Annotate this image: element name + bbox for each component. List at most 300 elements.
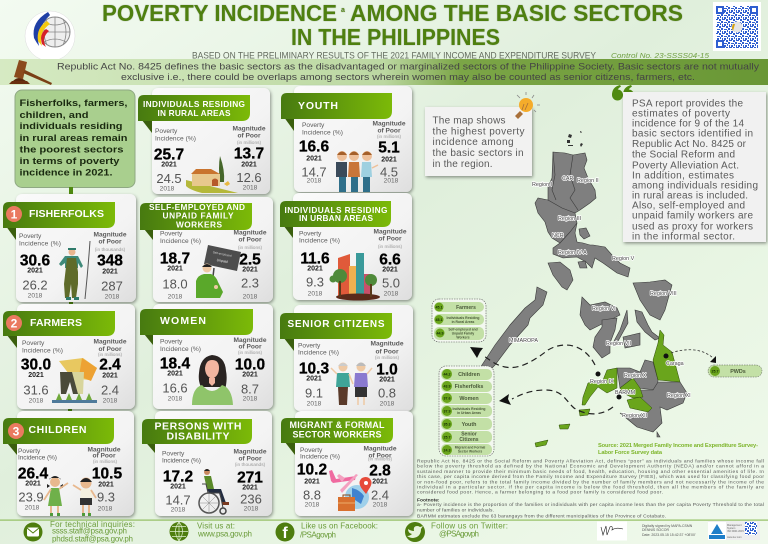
region labels: MIMAROPA [509, 338, 538, 344]
definition text: this case, per capita income derived from the Family Income and Expenditure Survey (FIES), which was used for classifying food poor [417, 474, 764, 480]
panel: persons with disability: Poverty [162, 450, 185, 458]
panel: women: of Poor [238, 344, 262, 350]
region labels: NCR [552, 233, 564, 239]
panel: persons with disability: DISABILITY [166, 430, 230, 442]
panel: farmers: Poverty [22, 340, 45, 347]
title: AMONG THE BASIC SECTORS [350, 0, 683, 26]
panel: children: 2018 [98, 505, 113, 512]
panel: individuals residing in rural areas: INDIVIDUALS RESIDING [143, 99, 245, 109]
panel: migrant and formal sector workers: Poverty [300, 447, 323, 454]
panel: individuals residing in urban areas: 2021 [307, 266, 323, 272]
legend: Region IX sectors: Individuals Residing [453, 407, 485, 411]
region labels: Region II [577, 178, 599, 184]
panel: women: 2021 [167, 370, 183, 378]
arrow: Region IX to left legend [484, 345, 613, 414]
legend: Region IX sectors: Sector Workers [458, 450, 482, 454]
panel: persons with disability: Magnitude [234, 448, 267, 456]
callout: map note: The map shows [432, 116, 506, 126]
panel: farmers: Incidence (%) [22, 348, 63, 354]
panel: persons with disability: 2018 [244, 505, 259, 512]
panel: individuals residing in urban areas: Incidence (%) [299, 238, 340, 244]
panel: senior citizens: SENIOR CITIZENS [288, 319, 385, 330]
panel: migrant and formal sector workers: Incidence (%) [300, 454, 340, 460]
panel: key finding: individuals residing [20, 121, 123, 132]
legend: MIMAROPA sectors: Farmers [456, 305, 476, 311]
callout: map note: in the region. [432, 159, 492, 170]
panel: fisherfolks: of Poor [98, 238, 122, 245]
panel: self-employed and unpaid family workers: SELF-EMPLOYED AND [149, 202, 245, 212]
panel: individuals residing in rural areas: Poverty [155, 128, 178, 135]
panel: key finding: incidence in 2021. [20, 168, 112, 178]
panel: migrant and formal sector workers: (in millions) [368, 456, 393, 462]
panel: self-employed and unpaid family workers: 2018 [168, 293, 183, 300]
panel: self-employed and unpaid family workers: 2021 [167, 266, 183, 272]
definition text: or non-food poor, refers to the total family income divided by the number of family members and not necessarily the income of the [417, 479, 764, 485]
rank badge 2: 2 [11, 316, 18, 330]
panel: key finding: in terms of poverty [20, 156, 120, 167]
panel: women: WOMEN [160, 315, 206, 327]
illustration: farmer [52, 358, 97, 403]
footer: Facebook: /PSAgovph [300, 530, 336, 540]
illustration: protester with sign: Unpaid [216, 258, 228, 264]
panel: youth: 2018 [384, 177, 399, 184]
panel: persons with disability: 14.7 [165, 493, 191, 508]
panel: individuals residing in rural areas: (in millions) [237, 140, 262, 146]
source note: Labor Force Survey data [598, 450, 663, 456]
panel: migrant and formal sector workers: 2.8 [369, 462, 391, 480]
panel: self-employed and unpaid family workers: (in millions) [238, 245, 263, 251]
region labels: Region XII [622, 413, 647, 419]
panel: youth: 5.1 [378, 140, 400, 156]
panel: key finding: Fisherfolks, farmers, [20, 98, 128, 109]
region labels: Region V [612, 256, 635, 262]
panel: persons with disability: (in thousands) [235, 462, 266, 468]
footnotes: Footnote: [417, 498, 440, 504]
panel: senior citizens [280, 305, 413, 411]
panel: fisherfolks: 26.2 [22, 278, 48, 293]
callout: map note: the basic sectors in [432, 148, 524, 159]
panel: farmers: 2021 [102, 372, 118, 380]
region labels: Region VIII [650, 291, 677, 297]
digital signature note: Digitally signed by MAPA-CSMN [642, 524, 693, 528]
panel: PSA report text: Also, self-employed and [632, 200, 745, 212]
panel: children: 9.3 [97, 490, 115, 505]
QR code [713, 2, 761, 51]
digital signature note [642, 524, 696, 537]
footnotes: a- Poverty incidence is the proportion of the families or individuals with per capita income less than the per capita Poverty Threshold to the total [417, 502, 764, 508]
digital signature note: Date: 2023.05.15 15:42:37 +08'00' [642, 533, 696, 537]
panel: youth: Incidence (%) [302, 130, 343, 136]
footer: website: Visit us at: [197, 522, 235, 530]
region labels: Region IV-A [558, 250, 587, 256]
legend: Region IX sectors: Women [459, 396, 479, 402]
panel: migrant and formal sector workers: 8.8 [303, 488, 321, 503]
panel: migrant and formal sector workers: SECTOR WORKERS [292, 430, 382, 440]
illustration: plane, globe and suitcase [329, 470, 372, 511]
footer: Twitter [405, 522, 508, 542]
footer: Facebook: Like us on Facebook: [301, 522, 378, 530]
panel: senior citizens: 2018 [380, 400, 395, 407]
panel: individuals residing in rural areas: 13.7 [234, 146, 264, 162]
panel: PSA report text [623, 92, 766, 242]
panel: youth: Magnitude [373, 120, 406, 128]
certification marks: Management [727, 524, 742, 527]
panel: fisherfolks: 2021 [102, 268, 118, 276]
legend: MIMAROPA sectors: Self-employed and [448, 328, 478, 332]
certification marks [708, 521, 760, 540]
panel: fisherfolks: FISHERFOLKS [29, 208, 104, 220]
region labels: Caraga [666, 361, 684, 367]
title: POVERTY INCIDENCE [102, 0, 337, 26]
panel: persons with disability: 2018 [171, 506, 186, 513]
icon: opening quotation mark [612, 85, 634, 100]
panel: farmers: Magnitude [94, 338, 127, 346]
panel: senior citizens: Magnitude [371, 340, 404, 348]
panel: women: 18.4 [160, 356, 190, 372]
panel: individuals residing in rural areas: of Poor [237, 132, 261, 140]
legend: MIMAROPA sectors: in Rural Areas [452, 320, 475, 324]
panel: key finding [15, 90, 135, 188]
footer: Facebook [276, 522, 378, 542]
legend: Region IX sectors: Youth [462, 422, 476, 428]
panel: self-employed and unpaid family workers [140, 197, 273, 302]
panel: women: 10.0 [235, 356, 265, 374]
panel: women: 2021 [242, 372, 258, 378]
illustration: person in wheelchair [199, 469, 229, 514]
panel: self-employed and unpaid family workers: Poverty [160, 230, 183, 238]
panel: migrant and formal sector workers: 2021 [372, 478, 388, 486]
panel: senior citizens: of Poor [375, 348, 399, 356]
panel: individuals residing in urban areas: 9.3 [306, 275, 324, 290]
panel: key finding: in rural areas remain [20, 133, 128, 144]
panel: individuals residing in rural areas: 2018 [243, 184, 258, 192]
panel: children: 23.9 [18, 490, 44, 505]
band: Republic Act statement: exclusive i.e., there could be overlaps among sectors wherein women may also be counted as senior citizens, farmers, etc. [121, 72, 695, 83]
illustration: children [44, 476, 96, 516]
legend: MIMAROPA sectors: Workers [456, 336, 470, 340]
panel: women: 2018 [243, 395, 258, 402]
illustration: woman [192, 355, 233, 405]
footer: technical inquiries: For technical inquiries: [50, 520, 135, 529]
legend: Region IX sectors: 37.9 [444, 410, 450, 414]
panel: individuals residing in rural areas: Magnitude [233, 126, 266, 132]
panel: children: (in millions) [93, 459, 118, 465]
panel: individuals residing in urban areas: 2018 [308, 290, 323, 297]
panel: farmers: FARMERS [30, 317, 82, 329]
definition text [417, 458, 764, 496]
panel: self-employed and unpaid family workers: 2.5 [239, 252, 261, 268]
source note [598, 443, 758, 456]
panel: women: 8.7 [241, 382, 259, 397]
definition text: individual in a particular sector. If the per capita income is below the food threshold, then all the members of the family are [417, 484, 764, 490]
footnotes: BARMM estimates exclude the 63 barangays from the different municipalities of the Province of Cotabato. [417, 514, 666, 520]
panel: children: 2018 [25, 504, 40, 511]
title [102, 0, 683, 50]
panel: senior citizens: 0.8 [378, 386, 396, 401]
arrow heads and region dots [470, 347, 716, 405]
panel: PSA report text: in rural areas is included. [632, 190, 748, 202]
panel: fisherfolks: Incidence (%) [19, 240, 61, 248]
panel: persons with disability: 271 [237, 470, 263, 486]
panel: individuals residing in urban areas: 6.6 [379, 252, 401, 268]
subtitle: BASED ON THE PRELIMINARY RESULTS OF THE 2021 FAMILY INCOME AND EXPENDITURE SURVEY [192, 50, 597, 62]
panel: individuals residing in rural areas: IN RURAL AREAS [158, 108, 231, 118]
arrow: Caraga to PWDs [671, 350, 713, 358]
legend: Region IX sectors: Migrant and Formal [455, 446, 485, 450]
panel: PSA report text: in the informal sector. [632, 232, 735, 242]
panel: PSA report text: PSA report provides the [632, 98, 743, 110]
footer: website [170, 522, 252, 541]
panel: youth: 2021 [306, 156, 322, 162]
title: a [341, 7, 345, 14]
logo: Philippine Statistics Authority [25, 11, 75, 61]
panel: fisherfolks: 348 [97, 252, 123, 270]
illustration: rural house [186, 156, 238, 193]
panel: migrant and formal sector workers: 2018 [305, 501, 320, 508]
panel: persons with disability: PERSONS WITH [154, 420, 242, 432]
highlighted regions [535, 330, 680, 447]
footer: website: www.psa.gov.ph [197, 530, 252, 538]
panel: PSA report text: incidence for 9 of the 14 [632, 118, 744, 130]
region labels [509, 176, 691, 419]
panel: self-employed and unpaid family workers: of Poor [238, 236, 262, 244]
panel: persons with disability: 236 [240, 492, 262, 507]
panel: senior citizens: 10.3 [299, 360, 329, 378]
panel: children: CHILDREN [28, 424, 86, 436]
panel: fisherfolks: 2021 [27, 268, 43, 274]
panel: individuals residing in rural areas: 12.6 [236, 170, 262, 185]
panel: children: 10.5 [92, 466, 122, 482]
panel: individuals residing in urban areas: 2018 [384, 290, 399, 297]
panel: migrant and formal sector workers: of Poor [368, 452, 392, 460]
legend: Region IX sectors: 35.3 [444, 422, 450, 426]
panel: fisherfolks: Magnitude [94, 232, 127, 238]
panel: migrant and formal sector workers: 2018 [373, 501, 388, 508]
panel: individuals residing in rural areas: 24.5 [156, 171, 182, 186]
panel: fisherfolks: 2018 [105, 293, 120, 300]
illustration: protester with sign [196, 245, 241, 298]
legend: PWDs: PWDs [730, 369, 746, 375]
legend: MIMAROPA sectors: 45.1 [436, 318, 442, 322]
panel: PSA report text: the Social Reform and [632, 150, 735, 160]
panel: farmers: 2018 [103, 397, 118, 404]
panel: individuals residing in urban areas: of Poor [378, 236, 402, 242]
legend: Region IX sectors: 44.2 [444, 372, 450, 376]
panel: women [140, 304, 273, 409]
signature [597, 522, 627, 540]
illustration: fisherman [59, 241, 90, 300]
legend: Region IX sectors: in Urban Areas [457, 411, 481, 415]
panel: individuals residing in urban areas: (in millions) [378, 244, 403, 250]
panel: individuals residing in urban areas: 11.6 [300, 250, 330, 268]
region labels: Region X [624, 373, 647, 379]
legend: MIMAROPA sectors: 44.9 [436, 332, 444, 336]
definition text: Republic Act No. 8425 or the Social Reform and Poverty Alleviation Act, defines “poor” as individuals and families whose income fall [417, 458, 764, 464]
panel: individuals residing in rural areas: Incidence (%) [155, 136, 196, 142]
panel: individuals residing in urban areas [280, 193, 412, 300]
legend: PWDs [708, 365, 762, 377]
panel: fisherfolks [3, 194, 136, 302]
panel: youth: 2021 [381, 156, 397, 164]
region labels: Region VI [592, 306, 616, 312]
panel: women: (in millions) [238, 350, 263, 356]
panel: PSA report text: among individuals residing [632, 180, 758, 192]
panel: farmers: 2.4 [99, 356, 121, 374]
callout: map note: the highest poverty [432, 126, 524, 138]
illustration: protester with sign: Self-employed [212, 250, 232, 258]
panel: persons with disability [142, 411, 272, 516]
legend: Region IX sectors: 43.9 [444, 384, 450, 388]
footnotes: number of families or individuals. [417, 508, 494, 514]
panel: individuals residing in rural areas [138, 88, 270, 194]
band: Republic Act statement: Republic Act No. 8425 defines the basic sectors as the disadvantaged or marginalized sectors of the Philippine Society. Basic sectors are not mutually [57, 61, 759, 72]
panel: fisherfolks: 30.6 [20, 252, 50, 270]
panel: women: Incidence (%) [160, 346, 201, 353]
panel: youth [281, 86, 412, 192]
region labels: Region VII [606, 341, 631, 347]
rank badge 3: 3 [13, 424, 20, 438]
panel: PSA report text: In addition, estimates [632, 170, 734, 182]
panel: children: of Poor [92, 452, 116, 460]
panel: fisherfolks: 287 [101, 279, 123, 294]
illustration: three youths [336, 151, 378, 192]
legend: MIMAROPA sectors: Unpaid Family [452, 332, 474, 336]
panel: senior citizens: (in millions) [375, 355, 400, 361]
panel: farmers [3, 304, 135, 409]
region labels: Region III [558, 216, 581, 222]
legend: Region IX sectors: Children [458, 372, 480, 378]
panel: farmers: 31.6 [23, 382, 49, 398]
panel: PSA report text: Poverty Alleviation Act. [632, 160, 739, 172]
panel: fisherfolks: 2018 [28, 292, 43, 299]
panel: persons with disability: Incidence (%) [162, 458, 201, 464]
panel: self-employed and unpaid family workers: 18.7 [160, 250, 190, 268]
legend: Region IX sectors: Fisherfolks [455, 384, 483, 390]
panel: key finding: the poorest sectors [20, 144, 124, 156]
panel: children: 2021 [98, 482, 114, 488]
panel: self-employed and unpaid family workers: WORKERS [176, 220, 222, 230]
legend: MIMAROPA sectors: Individuals Residing [447, 316, 479, 320]
control number: Control No. 23-SSSS04-15 [611, 51, 710, 60]
panel: farmers: 2018 [29, 397, 44, 404]
panel: children: 2021 [25, 480, 41, 488]
legend: PWDs: 25.7 [712, 370, 718, 374]
panel: women: 16.6 [162, 381, 188, 396]
panel: women: Poverty [160, 338, 183, 346]
panel: farmers: 30.0 [21, 356, 51, 374]
callout: map note [425, 107, 532, 176]
title: IN THE PHILIPPINES [291, 24, 500, 50]
panel: senior citizens: 1.0 [376, 362, 398, 378]
panel: PSA report text: basic sectors identified in [632, 128, 753, 140]
definition text: considered food poor. Hence, a farmer belonging to a food poor family is considered food poor. [417, 490, 663, 496]
footer rule [0, 520, 768, 521]
panel: senior citizens: 2021 [379, 376, 395, 384]
panel: youth: 4.5 [380, 165, 398, 180]
panel: youth: 14.7 [301, 165, 327, 180]
definition text: sustained manner to provide their minimum basic needs of food, health, education, housing and other essential amenities of life. In [417, 469, 764, 475]
panel: women: Magnitude [234, 337, 267, 344]
rank badge 1: 1 [11, 208, 18, 222]
panel: individuals residing in urban areas: Magnitude [374, 228, 407, 236]
footer: technical inquiries: ssss.staff@psa.gov.ph [52, 526, 127, 536]
panel: persons with disability: of Poor [238, 456, 262, 462]
panel: youth: Poverty [302, 122, 325, 129]
panel: senior citizens: Incidence (%) [298, 350, 339, 356]
footer: technical inquiries [24, 520, 135, 544]
panel: self-employed and unpaid family workers: 18.0 [162, 277, 188, 292]
panel: individuals residing in rural areas: 2018 [160, 185, 175, 192]
footer: Facebook: f [282, 525, 288, 542]
panel: farmers: of Poor [98, 346, 122, 353]
panel: youth: of Poor [377, 128, 401, 134]
panel: children: Poverty [18, 448, 41, 455]
panel: persons with disability: 17.2 [163, 468, 193, 486]
legend: Region IX sectors [439, 366, 494, 456]
legend: MIMAROPA sectors [432, 299, 486, 342]
panel: PSA report text: used as proxy for workers [632, 222, 753, 232]
panel: individuals residing in rural areas: 25.7 [154, 146, 184, 164]
icon: light bulb [515, 92, 540, 119]
legend: Region IX sectors: Senior [461, 432, 477, 438]
panel: youth: 16.6 [299, 138, 329, 156]
icon: gavel [9, 60, 52, 85]
smaller northern islands [567, 131, 583, 147]
panel: migrant and formal sector workers: 2021 [304, 478, 320, 486]
panel: self-employed and unpaid family workers: Incidence (%) [160, 238, 201, 245]
region labels: BARMM [615, 390, 636, 396]
certification marks: www.tuv.com [727, 536, 742, 539]
panel: fisherfolks: Poverty [19, 233, 42, 240]
panel: self-employed and unpaid family workers: 2021 [242, 266, 258, 274]
footnotes [417, 498, 764, 520]
certification marks: ISO 9001:2015 [727, 530, 744, 533]
panel: key finding: children, and [20, 110, 89, 121]
definition text: below the poverty threshold as defined by the National Economic and Development Authority (NEDA) and/or cannot afford in a [417, 464, 764, 470]
region labels: CAR [562, 176, 573, 182]
panel: farmers: (in millions) [98, 352, 123, 358]
legend: Region IX sectors: Citizens [459, 437, 479, 443]
panel: farmers: 2021 [28, 372, 44, 379]
panel: senior citizens: 2021 [306, 376, 322, 382]
region labels: Region XI [667, 393, 691, 399]
panel: PSA report text: unpaid family workers are [632, 210, 753, 222]
map: Philippines by region [475, 131, 691, 447]
panel: migrant and formal sector workers: Magnitude [364, 446, 397, 452]
panel: PSA report text: estimates of poverty [632, 108, 730, 120]
panel: children [3, 411, 134, 516]
Luzon and central islands [475, 152, 687, 437]
panel: senior citizens: 2018 [307, 400, 322, 407]
callout: map note: incidence among [432, 137, 514, 148]
legend: Region IX sectors: 24.3 [444, 448, 450, 452]
panel: senior citizens: 9.1 [305, 386, 323, 401]
legend: MIMAROPA sectors: 45.1 [436, 306, 442, 310]
legend: Region IX sectors: 37.6 [444, 396, 450, 400]
panel: senior citizens: Poverty [298, 342, 321, 350]
panel: fisherfolks: (in thousands) [95, 247, 126, 253]
panel: women: 2018 [168, 395, 183, 402]
panel: persons with disability: 2021 [170, 484, 186, 490]
panel: youth: YOUTH [298, 100, 338, 112]
illustration: city buildings and trees [330, 253, 380, 300]
panel: self-employed and unpaid family workers: 2.3 [241, 276, 259, 291]
footer: Twitter: Follow us on Twitter: [431, 522, 508, 530]
panel: individuals residing in urban areas: Poverty [299, 230, 322, 238]
panel: children: 26.4 [18, 466, 48, 482]
panel: migrant and formal sector workers: 2.4 [371, 488, 389, 503]
footer: Twitter: @PSAgovph [439, 530, 479, 538]
